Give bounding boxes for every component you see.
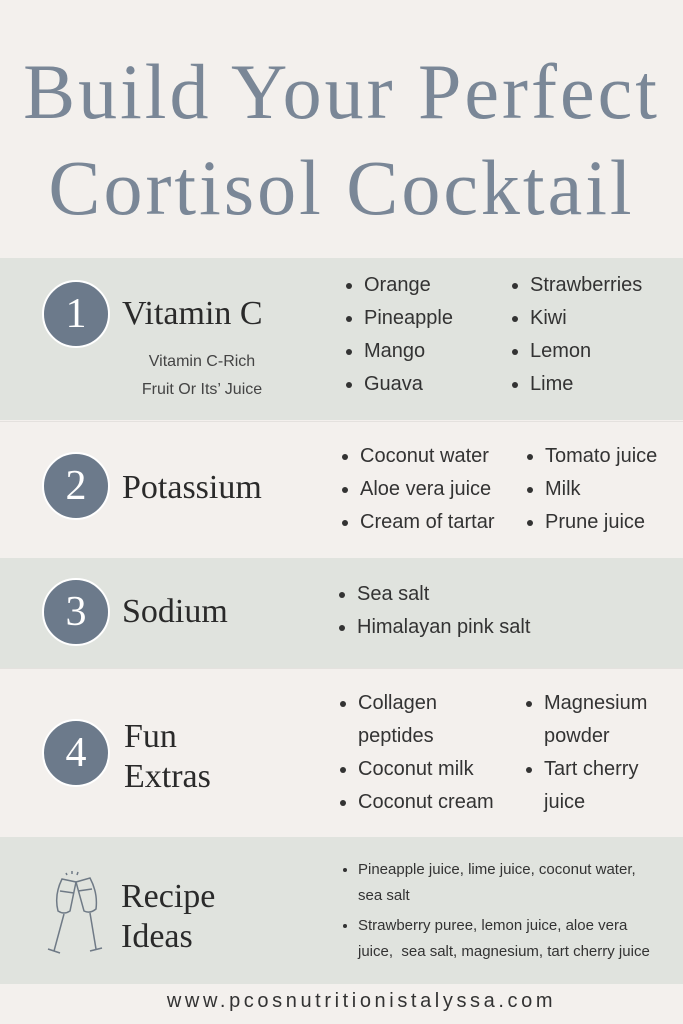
- list col 1: Coconut cream: [358, 791, 494, 813]
- list col 1: Collagen: [358, 692, 437, 714]
- list col 2: Tart cherry: [544, 758, 638, 780]
- heading: recipe ideas: Recipe: [121, 878, 215, 915]
- list col 1: Guava: [364, 373, 423, 395]
- list col 2: Prune juice: [545, 511, 645, 533]
- subtitle: Vitamin C-Rich: [149, 353, 255, 370]
- list col 2: Strawberries: [530, 274, 642, 296]
- heading: sodium: Sodium: [122, 593, 228, 630]
- heading: vitamin c: Vitamin C: [122, 295, 263, 332]
- panel: sodium: [0, 558, 683, 668]
- title: Cortisol Cocktail: [48, 144, 635, 231]
- title: Build Your Perfect: [23, 48, 660, 135]
- list col 2: Kiwi: [530, 307, 567, 329]
- list col 1: [342, 445, 494, 533]
- icon: number 1: [42, 280, 110, 348]
- icon: number 2: [42, 452, 110, 520]
- subtitle: Fruit Or Its’ Juice: [142, 381, 262, 398]
- list col 1: Aloe vera juice: [360, 478, 491, 500]
- icon: number 4: 4: [66, 730, 86, 776]
- heading: recipe ideas: Ideas: [121, 918, 193, 955]
- list col 2: [526, 692, 647, 813]
- panel: vitamin c: [0, 258, 683, 420]
- list col 1: Coconut water: [360, 445, 489, 467]
- list col 2: powder: [544, 725, 610, 747]
- heading: fun extras: Extras: [124, 758, 211, 795]
- heading: fun extras: [124, 718, 211, 795]
- recipe list: [343, 861, 650, 960]
- panel: fun extras: [0, 668, 683, 838]
- list col 1: Cream of tartar: [360, 511, 494, 533]
- list col 2: Lemon: [530, 340, 591, 362]
- list col 1: [340, 692, 494, 813]
- list col 1: Orange: [364, 274, 431, 296]
- subtitle: [142, 353, 262, 398]
- list col 2: juice: [544, 791, 585, 813]
- list col 2: Tomato juice: [545, 445, 657, 467]
- list col 1: peptides: [358, 725, 434, 747]
- list col 1: Pineapple: [364, 307, 453, 329]
- list col 2: [512, 274, 642, 395]
- list col 2: Magnesium: [544, 692, 647, 714]
- list col 1: Coconut milk: [358, 758, 474, 780]
- heading: recipe ideas: [121, 878, 215, 955]
- list: [339, 583, 530, 638]
- list col 2: [527, 445, 657, 533]
- panel: potassium: [0, 421, 683, 559]
- recipe list: Strawberry puree, lemon juice, aloe vera juice, sea salt, magnesium, tart cherry juice: [358, 917, 650, 960]
- list col 1: [346, 274, 453, 395]
- icon: champagne glasses: [48, 871, 102, 954]
- heading: potassium: Potassium: [122, 469, 262, 506]
- list: Himalayan pink salt: [357, 616, 530, 638]
- footer url: www.pcosnutritionistalyssa.com: [167, 990, 556, 1012]
- recipe list: Pineapple juice, lime juice, coconut water, sea salt: [358, 861, 636, 904]
- icon: number 2: 2: [66, 463, 86, 509]
- panel: recipe ideas: [0, 837, 683, 984]
- icon: number 3: [42, 578, 110, 646]
- icon: number 4: [42, 719, 110, 787]
- list: Sea salt: [357, 583, 429, 605]
- icon: number 1: 1: [66, 291, 86, 337]
- heading: fun extras: Fun: [124, 718, 177, 755]
- list col 1: Mango: [364, 340, 425, 362]
- title: [23, 48, 660, 231]
- list col 2: Lime: [530, 373, 573, 395]
- icon: number 3: 3: [66, 589, 86, 635]
- list col 2: Milk: [545, 478, 581, 500]
